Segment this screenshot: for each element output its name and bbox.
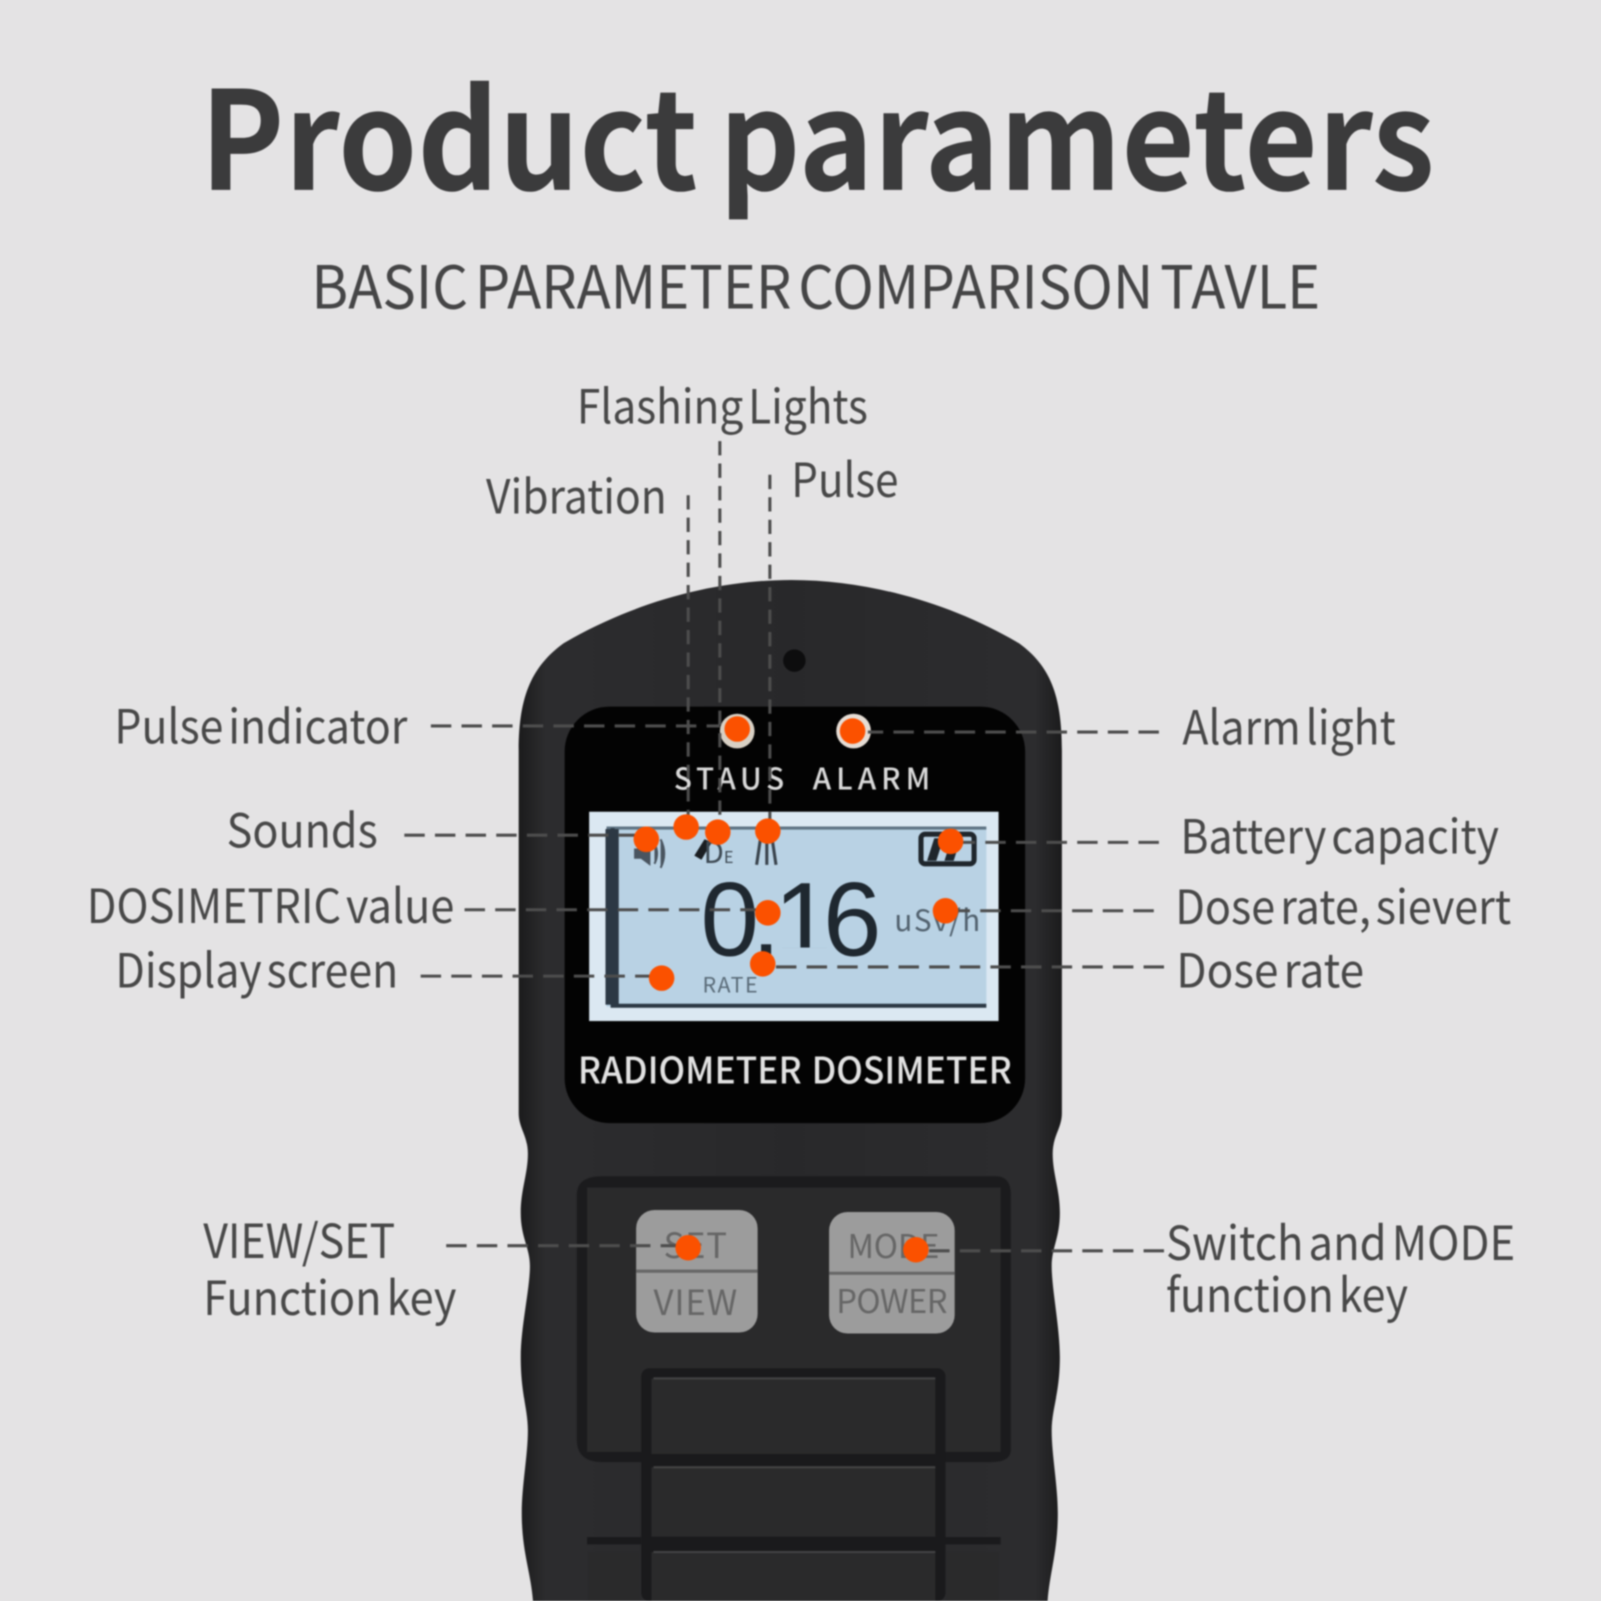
- label: Pulse indicator: Pulse indicator: [114, 689, 408, 757]
- title: Product parameters: [200, 32, 1435, 230]
- label: Switch and MODE function key: [1166, 1206, 1515, 1326]
- label: VIEW/SET Function key: VIEW/SET: [203, 1204, 395, 1272]
- status light: [720, 714, 755, 748]
- right button: [829, 1212, 955, 1333]
- LCD screen: [589, 812, 999, 1021]
- label: VIEW/SET Function key: [203, 1204, 456, 1329]
- left button: [636, 1210, 758, 1332]
- product name: RADIOMETER DOSIMETER: [578, 1040, 1012, 1094]
- label: Flashing Lights: Flashing Lights: [577, 370, 868, 438]
- icon: speaker: [635, 839, 664, 868]
- label: Display screen: Display screen: [115, 933, 398, 1001]
- rate label: RATE: [702, 968, 758, 999]
- status label: STAUS: [674, 755, 784, 798]
- label: Battery capacity: Battery capacity: [1180, 800, 1499, 868]
- label: Dose rate, sievert: Dose rate, sievert: [1175, 870, 1511, 938]
- label: Switch and MODE function key: function key: [1166, 1258, 1408, 1326]
- reading value: 0.16: [700, 862, 881, 979]
- flashing lights indicator: DE: [704, 829, 734, 872]
- label: Pulse: Pulse: [791, 443, 899, 511]
- left button: VIEW: [653, 1275, 737, 1325]
- label: Switch and MODE function key: Switch and MODE: [1166, 1206, 1515, 1274]
- right button: POWER: [836, 1276, 948, 1323]
- alarm light: [836, 714, 871, 748]
- label: Vibration: Vibration: [486, 460, 667, 528]
- left button: SET: [664, 1218, 727, 1268]
- alarm label: ALARM: [813, 755, 930, 798]
- icon: pulse: [757, 837, 776, 865]
- label: Dose rate: Dose rate: [1176, 933, 1364, 1001]
- icon: vibration: [694, 839, 712, 860]
- right button: MODE: [847, 1221, 939, 1268]
- key panel outline: [577, 1176, 1011, 1462]
- device: radiometer dosimeter: [519, 580, 1062, 1601]
- label: Sounds: Sounds: [227, 793, 378, 861]
- unit label: uSv/h: [894, 897, 980, 940]
- black front panel: [565, 707, 1025, 1123]
- label: DOSIMETRIC value: DOSIMETRIC value: [87, 869, 454, 937]
- cover on digit base: [774, 948, 829, 958]
- sensor hole: [783, 649, 806, 672]
- subtitle: BASIC PARAMETER COMPARISON TAVLE: [311, 240, 1320, 326]
- grip ribs: [587, 1368, 1001, 1601]
- label: Alarm light: Alarm light: [1182, 690, 1396, 758]
- label: VIEW/SET Function key: Function key: [203, 1261, 456, 1329]
- marker dots: [634, 716, 963, 1263]
- leader lines: [404, 441, 1164, 1251]
- device body: [519, 580, 1062, 1601]
- icon: battery: [921, 834, 974, 864]
- key panel face: [587, 1187, 1001, 1452]
